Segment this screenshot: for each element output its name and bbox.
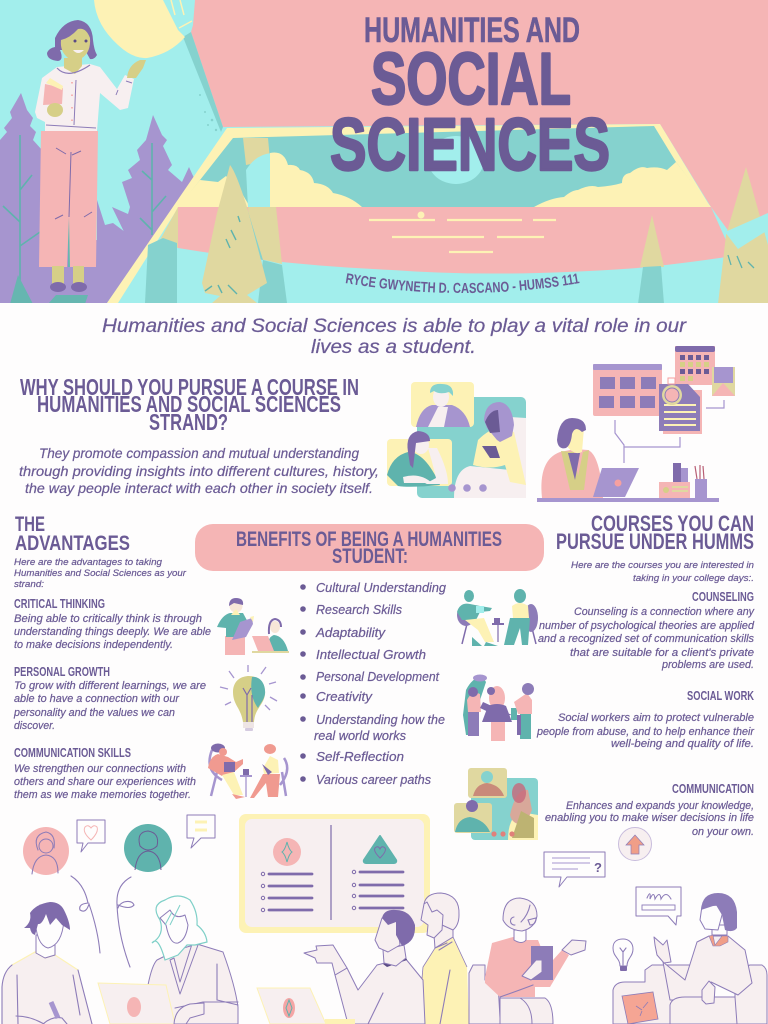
teal strip and stipple [183, 32, 223, 132]
why paragraph: the way people interact with each other in society itself. [25, 480, 373, 496]
heading: why pursue: HUMANITIES AND SOCIAL SCIENCES [37, 391, 341, 417]
courses intro [571, 560, 754, 584]
benefits list: Understanding how the [316, 712, 445, 727]
title: SCIENCES [330, 103, 610, 186]
tree: small tan [640, 215, 664, 267]
heading: why pursue: WHY SHOULD YOU PURSUE A COURSE IN [20, 374, 359, 400]
benefits list: Self-Reflection [316, 749, 404, 764]
bottom scene: woman with laptop [98, 896, 238, 1024]
icon: video call muted [454, 768, 538, 840]
column and cyan gap [243, 138, 270, 165]
bottom scene: man writing [2, 902, 92, 1024]
benefits list: Cultural Understanding [316, 580, 447, 595]
bottom scene: presentation board [239, 814, 430, 933]
pink sky [191, 0, 768, 240]
course: counseling: Counseling is a connection where any [574, 606, 755, 618]
advantages intro: strand: [14, 579, 44, 590]
advantage: communication skills: others and share our experiences with [14, 776, 196, 788]
benefits list [300, 580, 447, 787]
lake [178, 126, 711, 208]
advantage: communication skills: them as we make memories together. [14, 789, 191, 801]
courses intro: Here are the courses you are interested in [571, 560, 754, 571]
course: social work: people from abuse, and to help enhance their [536, 726, 755, 738]
heading: the advantages [15, 513, 130, 555]
tree: right tan [718, 167, 768, 304]
why paragraph [19, 445, 379, 496]
benefits list: Adaptability [315, 625, 387, 640]
author line: RYCE GWYNETH D. CASCANO - HUMSS 111 [346, 273, 580, 294]
advantage: personal growth: discover. [14, 720, 55, 732]
cloud centre [270, 152, 362, 207]
course: counseling: that are suitable for a client's private [570, 647, 754, 659]
icon: two people reading [217, 598, 289, 655]
why paragraph: They promote compassion and mutual understanding [39, 445, 359, 461]
why paragraph: through providing insights into different cultures, history, [19, 463, 379, 479]
course: counseling [538, 590, 755, 671]
course: communication: Enhances and expands your knowledge, [566, 800, 754, 812]
lake shimmer lines [369, 220, 556, 252]
advantage: critical thinking: CRITICAL THINKING [14, 597, 105, 611]
icon: light bulb [220, 665, 277, 731]
pill heading: benefits [195, 524, 544, 571]
speech bubble: question: ? [594, 860, 602, 875]
bottom scene: old man in yellow [418, 893, 469, 1024]
intro statement: lives as a student. [311, 337, 476, 358]
bottom scene: pointing man [257, 910, 425, 1024]
icon: two people talking [208, 744, 287, 799]
advantage: communication skills [14, 746, 196, 801]
heading: the advantages: ADVANTAGES [15, 532, 130, 555]
benefits list: Research Skills [316, 602, 402, 617]
icon: up arrow badge [618, 828, 652, 860]
pill heading: benefits: BENEFITS OF BEING A HUMANITIES [236, 528, 502, 551]
advantage: critical thinking: Being able to critically think is through [14, 613, 202, 625]
advantage: communication skills: COMMUNICATION SKILLS [14, 746, 131, 760]
course: communication: enabling you to make wiser decisions in life [545, 812, 754, 824]
courses intro: taking in your college days:. [633, 573, 754, 584]
icon: small light bulb [613, 939, 633, 971]
bottom scene: avatars and curves [23, 815, 215, 967]
course: communication: on your own. [692, 826, 754, 838]
bottom scene: smiling woman on sofa [613, 893, 767, 1024]
title: SOCIAL [371, 39, 571, 120]
course: social work [536, 689, 755, 750]
columns below lake [248, 207, 282, 264]
purple forest and ground [0, 93, 194, 304]
course: social work: well-being and quality of life. [611, 738, 754, 750]
cloud left of tree [178, 176, 250, 207]
advantage: communication skills: We strengthen our connections with [14, 763, 186, 775]
advantages intro [14, 557, 187, 590]
advantage: personal growth: PERSONAL GROWTH [14, 665, 110, 679]
course: communication [545, 782, 754, 838]
benefits list: Various career paths [316, 772, 431, 787]
benefits list: Creativity [316, 689, 374, 704]
title [330, 11, 610, 186]
illustration: video call [387, 382, 526, 498]
illustration: office worker [537, 346, 735, 502]
yellow frame [107, 124, 711, 303]
advantage: critical thinking: understanding things deeply. We are able [14, 626, 211, 638]
heading: courses [556, 511, 754, 554]
advantage: personal growth: To grow with different learnings, we are [14, 680, 206, 692]
sun reflection [428, 136, 484, 184]
tree: large tan [202, 165, 267, 303]
advantage: personal growth: personality and the values we can [13, 707, 175, 719]
icon: counseling session [457, 589, 538, 646]
heading: why pursue [20, 374, 359, 435]
icon: social work group [463, 674, 534, 741]
benefits list: real world works [314, 728, 406, 743]
speech bubble: question [544, 852, 605, 887]
advantage: personal growth [13, 665, 206, 732]
advantages intro: Here are the advantages to taking [14, 557, 163, 568]
hero banner [0, 0, 768, 305]
course: social work: Social workers aim to protect vulnerable [558, 712, 754, 724]
title: HUMANITIES AND [364, 11, 580, 50]
right clouds [534, 162, 711, 207]
course: counseling: and a recognized set of communication skills [538, 633, 754, 645]
benefits list: Personal Development [316, 669, 440, 684]
advantage: critical thinking: to make decisions independently. [14, 639, 173, 651]
advantages intro: Humanities and Social Sciences as your [14, 568, 187, 579]
balloon [94, 0, 185, 58]
advantage: personal growth: able to have a connection with our [14, 693, 180, 705]
intro statement: Humanities and Social Sciences is able to play a vital role in our [102, 316, 687, 337]
heading: why pursue: STRAND? [149, 409, 228, 435]
course: counseling: problems are used. [661, 659, 754, 671]
pill heading: benefits: STUDENT: [332, 545, 408, 568]
intro statement [102, 316, 687, 358]
pink lake [178, 207, 733, 274]
course: counseling: number of psychological theories are applied [539, 620, 755, 632]
speech bubble: scribble [636, 887, 681, 925]
heading: the advantages: THE [15, 513, 45, 536]
woman [35, 20, 146, 292]
benefits list: Intellectual Growth [316, 647, 426, 662]
bottom scene: person with tablet in chair [469, 898, 586, 1024]
advantage: critical thinking [14, 597, 211, 651]
